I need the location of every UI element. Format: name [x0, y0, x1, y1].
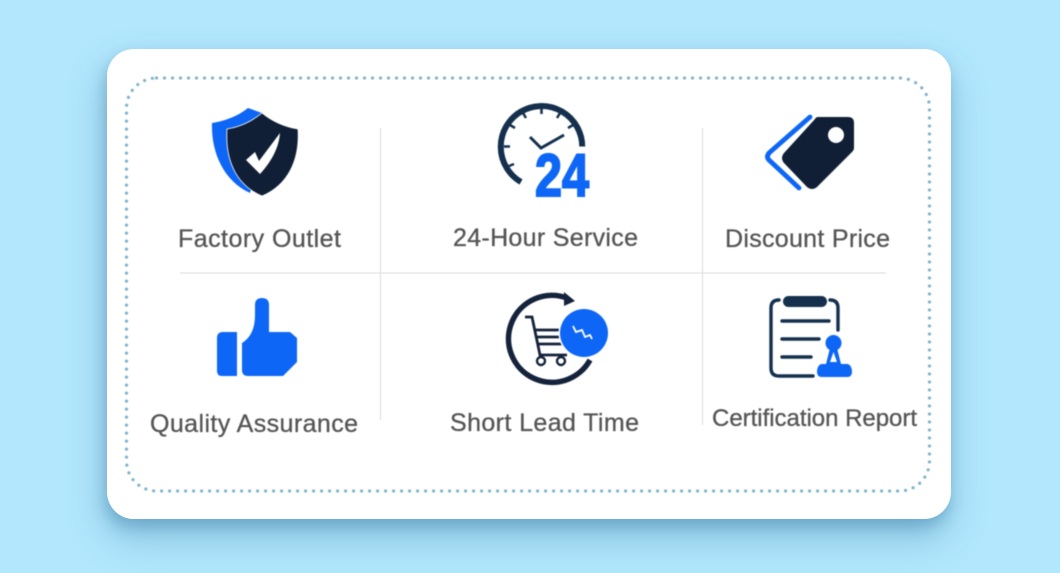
- label: Factory Outlet: Factory Outlet: [178, 225, 341, 253]
- label: Short Lead Time: Short Lead Time: [450, 409, 639, 437]
- icon: price tag: [768, 117, 854, 189]
- icon: clock with 24: 24: [535, 142, 590, 209]
- label: Discount Price: Discount Price: [725, 225, 890, 253]
- label: Quality Assurance: Quality Assurance: [150, 410, 358, 438]
- dotted border: [126, 78, 930, 491]
- grid dividers: [180, 128, 886, 425]
- icon: clock with 24: [501, 106, 590, 209]
- icon: thumbs up: [217, 298, 297, 376]
- label: Certification Report: Certification Report: [712, 405, 917, 432]
- icon: shield with check: [212, 108, 298, 196]
- panel: white card: [107, 49, 951, 519]
- icon: clipboard with stamp: [771, 296, 852, 377]
- icon: cart with lightning badge: [508, 292, 610, 382]
- label: 24-Hour Service: 24-Hour Service: [453, 224, 638, 252]
